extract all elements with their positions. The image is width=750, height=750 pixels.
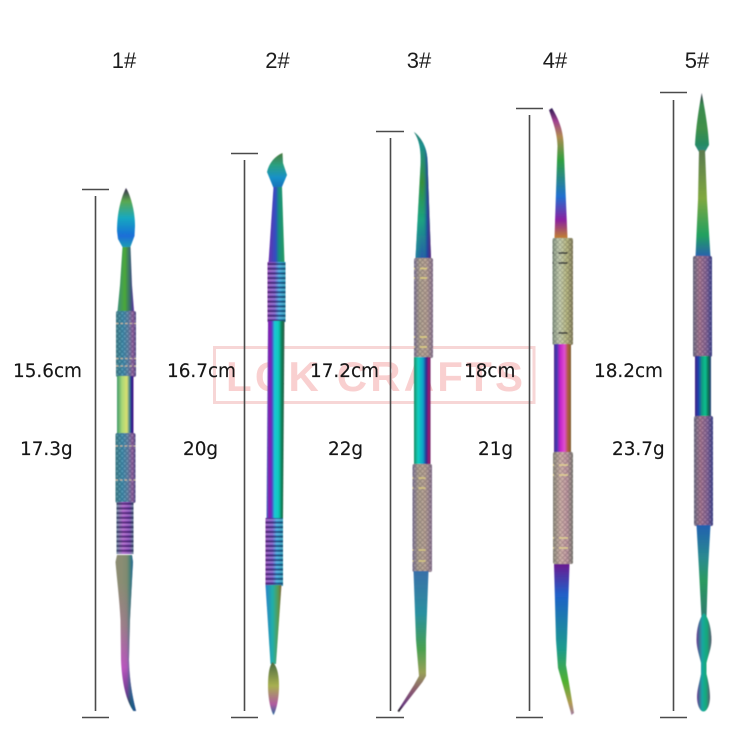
- dimension line: tool 5: [660, 92, 687, 718]
- tool 2 blade tip: [267, 153, 287, 188]
- heading: 2#: 2#: [265, 48, 290, 73]
- tool 5 lower shaft: [696, 525, 710, 618]
- tool 5: leaf tip and double bulb end: [693, 93, 713, 712]
- tool 5 bare section: [695, 356, 711, 417]
- tool 1 curved pick: [116, 555, 136, 711]
- tool 3 upper knurled handle: [414, 258, 433, 358]
- weight label: tool 3: 22g: [328, 439, 363, 460]
- tool 1 leaf tip: [117, 188, 135, 248]
- dimension line: tool 3: [376, 132, 404, 718]
- heading: 4#: 4#: [543, 48, 568, 73]
- tool 4 lower knurled handle: [553, 452, 573, 564]
- tool 1 neck: [118, 247, 134, 311]
- tool 2 taper: [266, 585, 282, 664]
- tool 5 upper knurled handle: [693, 256, 712, 357]
- length label: tool 5: 18.2cm: [594, 361, 663, 382]
- tool 2 long shaft: [266, 321, 284, 519]
- weight label: tool 2: 20g: [183, 439, 218, 460]
- dimension line: tool 1: [82, 190, 109, 718]
- tool 1 bare section: [117, 376, 134, 434]
- length label: tool 1: 15.6cm: [13, 361, 82, 382]
- length label: tool 2: 16.7cm: [167, 361, 236, 382]
- tool 1 lower knurled handle: [116, 433, 136, 503]
- weight label: tool 5: 23.7g: [612, 439, 665, 460]
- tool 4: curved tip and bent pick: [549, 108, 574, 715]
- dimension line: tool 2: [231, 154, 258, 718]
- tool 1: leaf tip and curved pick: [116, 188, 136, 711]
- heading: 3#: 3#: [407, 48, 432, 73]
- tool 4 lower bent pick: [554, 564, 574, 715]
- tool 2 spoon: [268, 662, 279, 715]
- tool 4 curved tip: [549, 108, 568, 238]
- weight label: tool 4: 21g: [478, 439, 513, 460]
- length label: tool 4: 18cm: [464, 361, 515, 382]
- tool 2 lower ribs: [266, 518, 283, 586]
- tool 3 curved tip: [414, 132, 431, 258]
- tool 3 lower knurled handle: [412, 464, 432, 572]
- tool 5 neck: [696, 150, 710, 257]
- tool 2 upper ribs: [268, 262, 286, 322]
- watermark: LCK CRAFTS: LCK CRAFTS: [226, 353, 523, 400]
- tool 5 lower knurled handle: [694, 416, 713, 526]
- tool 3 bare section: [414, 357, 430, 465]
- heading: 5#: 5#: [685, 48, 710, 73]
- tool 4 bare section: [554, 344, 571, 453]
- length label: tool 3: 17.2cm: [310, 361, 379, 382]
- tool 5 lower bulb: [697, 660, 710, 712]
- weight label: tool 1: 17.3g: [20, 439, 73, 460]
- tool 2: blade and spoon: [266, 153, 287, 715]
- tool 5 leaf tip: [695, 93, 709, 152]
- tool 2 neck: [268, 187, 284, 263]
- tool 1 ribbed section: [116, 502, 134, 554]
- tool 3: curved hook and angled pick: [398, 132, 433, 712]
- tool 4 upper knurled handle: [552, 238, 573, 345]
- dimension line: tool 4: [516, 108, 543, 718]
- tool 5 upper bulb: [696, 613, 712, 663]
- tool 1 upper knurled handle: [116, 311, 136, 377]
- tool 3 lower shaft and angled pick: [398, 571, 428, 712]
- heading: 1#: 1#: [112, 48, 137, 73]
